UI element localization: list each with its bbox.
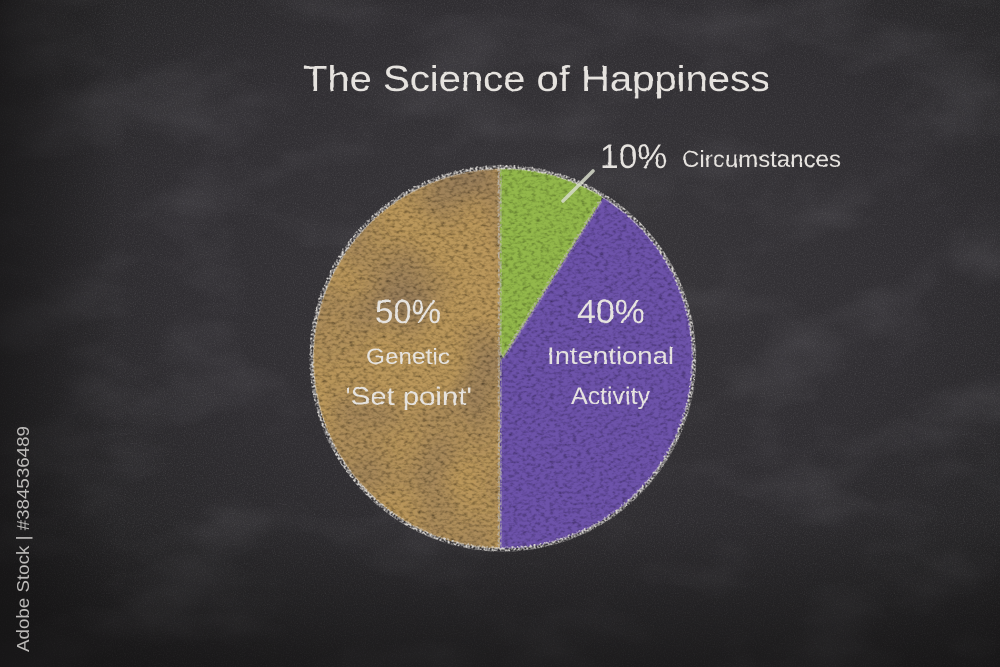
slice: intentional activity 40%: [500, 198, 705, 560]
label: 40% intentional activity: 40%: [577, 293, 645, 330]
pie chart: [300, 160, 705, 560]
slices clipped to the disc: [313, 168, 693, 548]
label: 50% genetic set point: 50%: [375, 293, 441, 330]
label: 10% circumstances: Circumstances: [682, 146, 841, 172]
slice: genetic set point 50%: [313, 168, 500, 548]
label: 50% genetic set point: [345, 293, 472, 411]
leader line: circumstances: [563, 171, 593, 201]
title: The Science of Happiness: [303, 58, 770, 99]
label: 50% genetic set point: 'Set point': [345, 383, 472, 411]
label: 10% circumstances: [600, 138, 841, 176]
label: 40% intentional activity: [547, 293, 674, 410]
label: 50% genetic set point: Genetic: [366, 344, 450, 369]
pie outline: [312, 168, 694, 550]
stock watermark id: Adobe Stock | #384536489: [13, 426, 33, 652]
label: 10% circumstances: 10%: [600, 138, 667, 176]
label: 40% intentional activity: Activity: [571, 383, 650, 410]
divider lines: [500, 168, 601, 549]
label: 40% intentional activity: Intentional: [547, 343, 674, 370]
slice: circumstances 10%: [500, 168, 602, 358]
